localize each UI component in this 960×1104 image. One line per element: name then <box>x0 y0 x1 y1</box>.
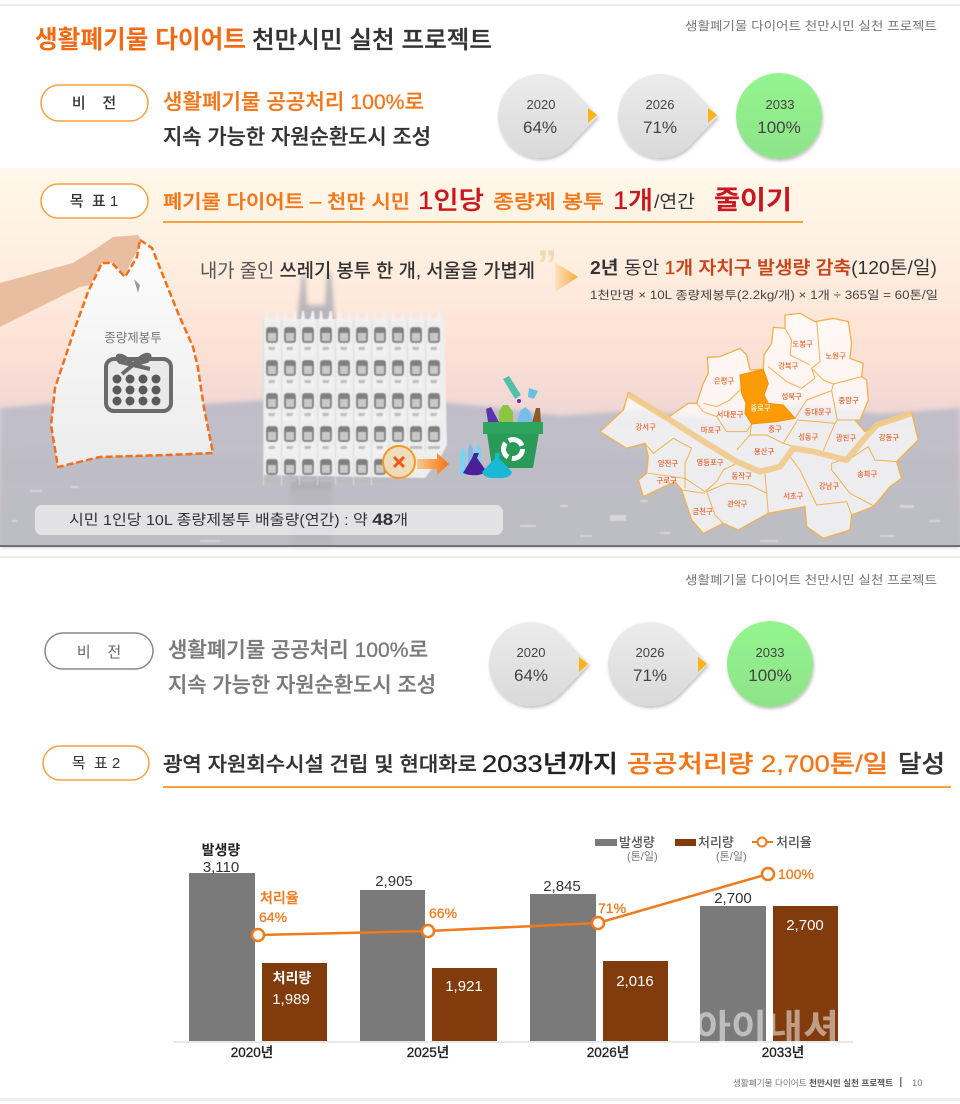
vision text: 생활폐기물 공공처리 100%로 <box>163 91 424 114</box>
progress badge 2020: 64% <box>523 118 557 137</box>
slogan text: 내가 줄인 쓰레기 봉투 한 개, 서울을 가볍게 <box>200 260 535 282</box>
map: Seoul districts: 종로구 <box>751 404 771 413</box>
progress badge 2020: 2020 <box>527 97 555 112</box>
progress badge 2026 lower: 2026 <box>636 645 664 660</box>
icon: hand holding garbage bag <box>0 235 213 467</box>
quote mark: ” <box>537 243 557 287</box>
vision text <box>163 91 431 149</box>
progress badge 2033 lower: 100% <box>748 666 792 685</box>
calculation text: 1천만명 × 10L 종량제봉투(2.2kg/개) × 1개 ÷ 365일 = 60톤/일 <box>590 288 938 302</box>
watermark: 아이내셔 <box>695 1007 839 1048</box>
map: Seoul districts: 금천구 <box>693 507 713 516</box>
year labels: 2033년 <box>762 1045 804 1060</box>
progress badge 2033 <box>736 73 822 159</box>
arrow to recycling <box>417 453 449 475</box>
map: Seoul districts: 강서구 <box>636 423 656 432</box>
progress badge 2033 lower: 2033 <box>756 645 784 660</box>
map: Seoul districts: 강남구 <box>819 481 839 490</box>
rate labels: 71% <box>598 900 626 916</box>
rate labels: 64% <box>259 909 287 925</box>
vision text lower: 생활폐기물 공공처리 100%로 <box>168 639 428 662</box>
goal 1 pill <box>41 184 148 218</box>
generation value labels <box>202 842 752 907</box>
goal 1 title: 폐기물 다이어트 – 천만 시민 <box>163 191 410 213</box>
chart legend: 처리량 <box>698 835 734 850</box>
rate labels: 100% <box>778 866 814 882</box>
result heading: 2년 동안 1개 자치구 발생량 감축 (120톤/일) <box>590 258 937 278</box>
map: Seoul districts: 은평구 <box>714 376 734 385</box>
map: Seoul districts: 송파구 <box>857 470 878 479</box>
year labels: 2026년 <box>587 1045 629 1060</box>
stack of 48 bags <box>263 311 447 485</box>
processing value labels: 2,700 <box>786 917 824 934</box>
goal 1 title: 1인당 <box>418 187 484 215</box>
map: Seoul districts: 동대문구 <box>804 407 832 416</box>
footer <box>733 1077 923 1089</box>
map: Seoul districts: 광진구 <box>836 434 856 443</box>
map: Seoul districts: 중구 <box>768 424 782 433</box>
map: Seoul districts: 양천구 <box>658 459 678 468</box>
goal 1 title <box>163 185 803 223</box>
main title: 천만시민 실천 프로젝트 <box>252 27 492 54</box>
processing value labels <box>272 917 824 1008</box>
generation value labels: 발생량 <box>202 842 240 858</box>
annual bag count callout: 시민 1인당 10L 종량제봉투 배출량(연간) : 약 48개 <box>69 510 408 529</box>
map: Seoul districts: 도봉구 <box>793 339 813 348</box>
map: Seoul districts: 강북구 <box>778 362 799 371</box>
icon: removed bag marker <box>383 446 415 478</box>
map: Seoul districts: 관악구 <box>727 499 748 508</box>
vision text lower: 지속 가능한 자원순환도시 조성 <box>168 674 436 697</box>
panel background skyline <box>0 168 960 547</box>
top page strip <box>0 4 960 6</box>
goal 1 pill: 목 표 1 <box>70 193 118 210</box>
vision text: 지속 가능한 자원순환도시 조성 <box>163 126 431 149</box>
progress badge 2033: 100% <box>757 118 801 137</box>
annual bag count callout <box>35 505 503 535</box>
bars 2025 <box>360 890 497 1041</box>
vision pill lower: 비 전 <box>77 644 121 661</box>
bar chart <box>173 835 853 1060</box>
chart legend: 처리율 <box>776 835 812 850</box>
goal 1 title: 1개 <box>613 187 653 215</box>
bars 2033 <box>700 906 838 1041</box>
goal 2 title <box>163 751 951 788</box>
footer: 생활폐기물 다이어트 천만시민 실천 프로젝트 <box>733 1078 893 1088</box>
chart legend: (톤/일) <box>716 849 747 863</box>
main title <box>35 26 492 54</box>
icon: recycling bin <box>460 376 543 478</box>
goal 1 title: /연간 <box>654 192 695 212</box>
generation value labels: 2,700 <box>714 890 752 907</box>
chart legend <box>595 835 812 863</box>
year labels: 2025년 <box>407 1045 449 1060</box>
map: Seoul districts: 서초구 <box>783 491 804 500</box>
map: Seoul districts: 동작구 <box>732 471 752 480</box>
goal 2 pill: 목 표 2 <box>72 755 120 772</box>
progress badge 2026 <box>618 74 718 158</box>
bars 2026 <box>530 894 668 1041</box>
vision pill <box>41 85 148 121</box>
arrow to result <box>555 262 578 292</box>
processing value labels: 처리량 <box>273 970 311 986</box>
map: Seoul districts: 중랑구 <box>839 396 859 405</box>
goal 2 title: 달성 <box>898 751 945 778</box>
chart legend: (톤/일) <box>627 849 658 863</box>
map: Seoul districts <box>600 313 918 538</box>
header running title: 생활폐기물 다이어트 천만시민 실천 프로젝트 <box>685 18 937 33</box>
progress badge 2020 lower: 2020 <box>517 645 545 660</box>
generation value labels: 2,845 <box>543 878 581 895</box>
chart legend: 발생량 <box>619 835 655 850</box>
bars 2020 <box>189 873 327 1041</box>
processing value labels: 1,921 <box>445 978 483 995</box>
vision text lower <box>168 639 436 697</box>
map: Seoul districts: 강동구 <box>879 433 899 442</box>
panel: goal 1 <box>0 168 960 547</box>
goal 2 title: 2033년까지 <box>482 751 618 778</box>
progress badge 2020 <box>498 74 598 158</box>
goal 2 title: 공공처리량 2,700톤/일 <box>627 751 888 778</box>
footer: 10 <box>912 1078 923 1089</box>
generation value labels: 3,110 <box>203 859 239 876</box>
map: Seoul districts: 노원구 <box>826 351 846 360</box>
header running title lower: 생활폐기물 다이어트 천만시민 실천 프로젝트 <box>685 572 937 587</box>
progress badge 2026 lower <box>608 622 708 706</box>
progress badge 2026: 2026 <box>646 97 674 112</box>
icon: hand holding garbage bag: 종량제봉투 <box>104 331 162 345</box>
processing value labels: 1,989 <box>272 991 310 1008</box>
progress badge 2026 lower: 71% <box>633 666 667 685</box>
map: Seoul districts: 성동구 <box>798 432 819 441</box>
rate labels: 처리율 <box>260 890 299 906</box>
progress badge 2033 lower <box>727 621 813 707</box>
goal 1 title: 줄이기 <box>714 185 792 215</box>
progress badge 2033: 2033 <box>766 97 794 112</box>
goal 2 title: 광역 자원회수시설 건립 및 현대화로 <box>163 753 477 776</box>
progress badge 2020 lower: 64% <box>514 666 548 685</box>
main title: 생활폐기물 다이어트 <box>35 26 246 54</box>
map: Seoul districts: 영등포구 <box>697 458 724 467</box>
map: Seoul districts: 구로구 <box>657 476 677 485</box>
year labels <box>231 1045 804 1060</box>
page separator <box>0 556 960 558</box>
map: Seoul districts: 성북구 <box>782 392 802 401</box>
rate labels <box>259 866 814 925</box>
progress badge 2026: 71% <box>643 118 677 137</box>
vision pill lower <box>45 633 153 669</box>
vision pill: 비 전 <box>72 95 116 112</box>
map: Seoul districts: 서대문구 <box>716 410 744 419</box>
map: Seoul districts: 마포구 <box>701 425 721 434</box>
processing rate line <box>252 868 774 941</box>
processing value labels: 2,016 <box>616 973 654 990</box>
goal 1 title: 종량제 봉투 <box>493 191 604 213</box>
rate labels: 66% <box>429 905 457 921</box>
bottom page strip <box>0 1098 960 1101</box>
goal 2 pill <box>43 746 149 780</box>
generation value labels: 2,905 <box>375 873 413 890</box>
year labels: 2020년 <box>231 1045 273 1060</box>
progress badge 2020 lower <box>489 622 589 706</box>
map: Seoul districts: 용산구 <box>754 447 774 456</box>
